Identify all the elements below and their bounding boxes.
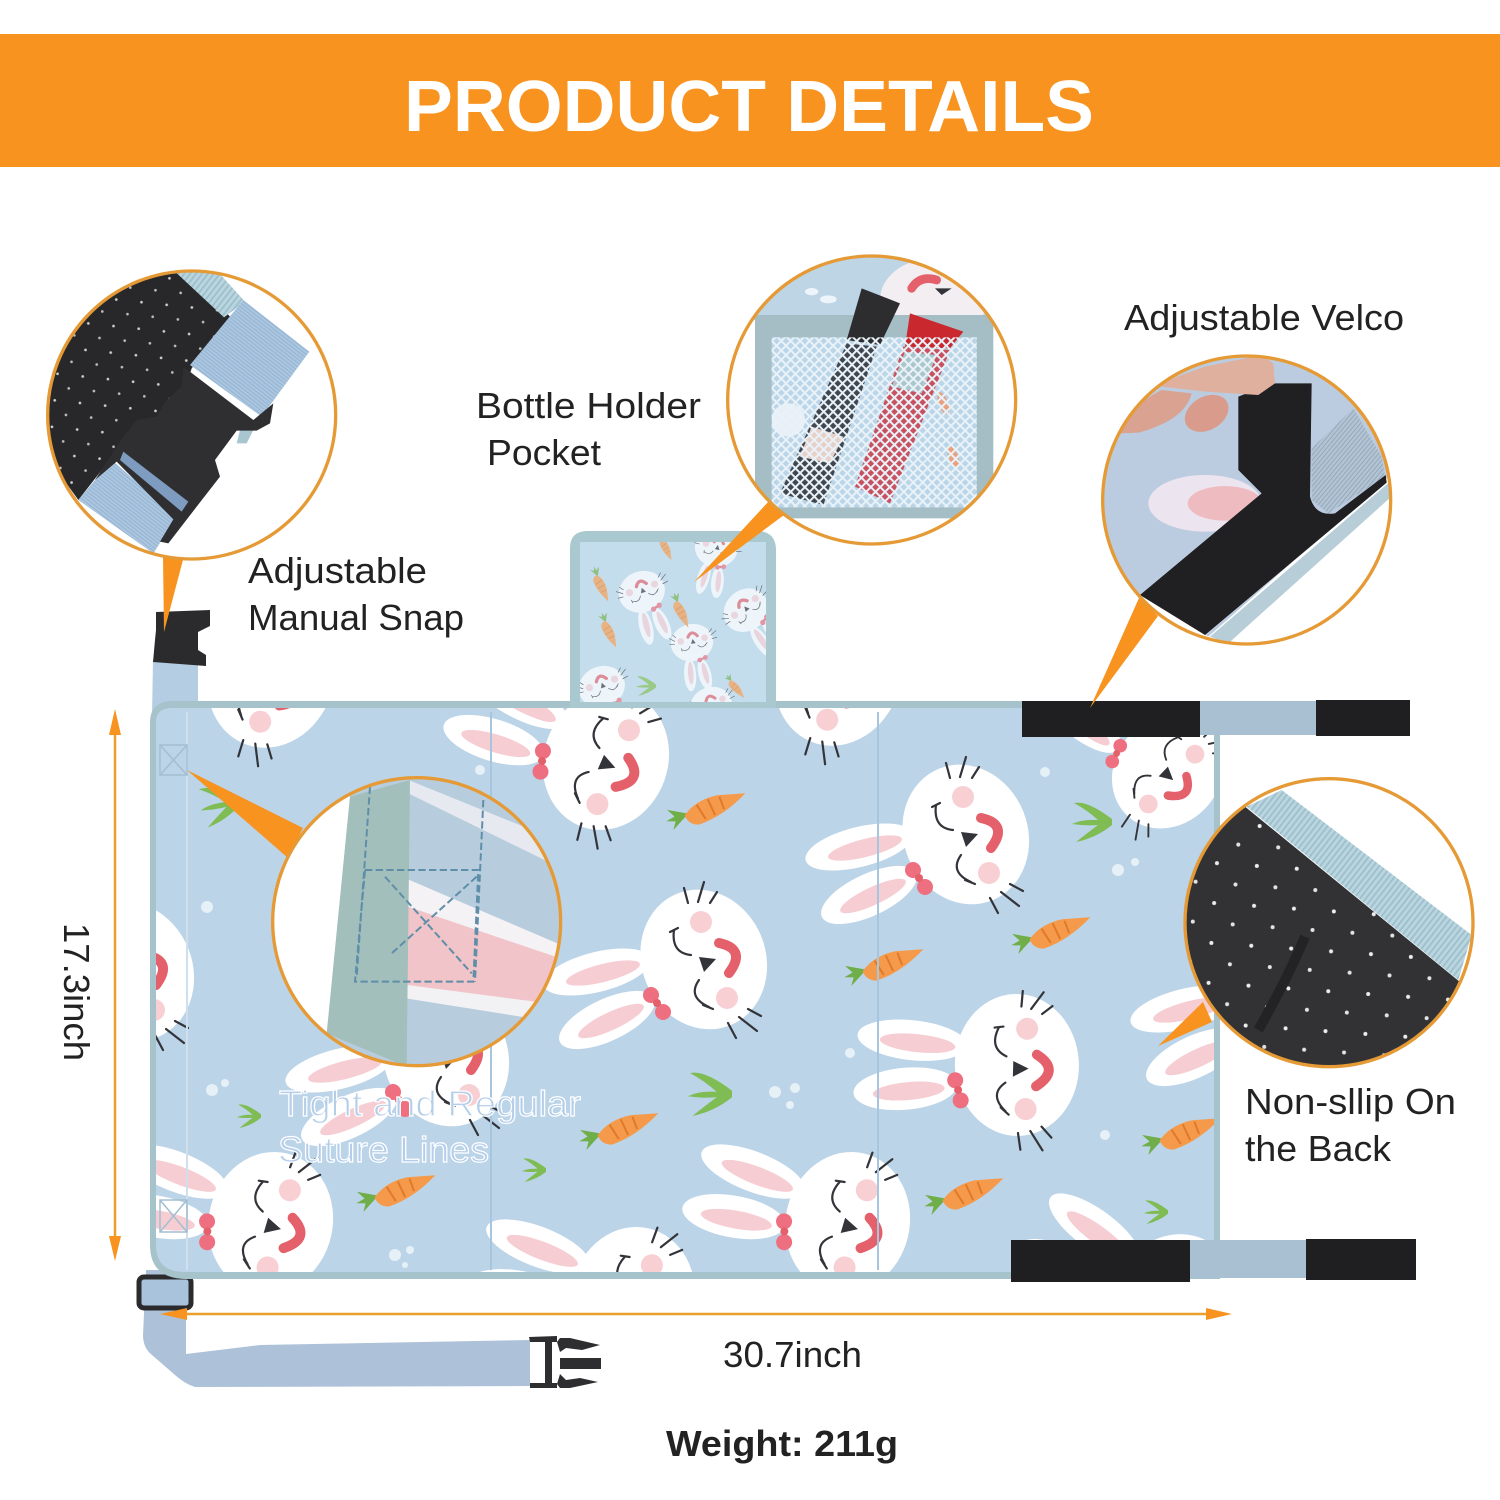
label: adjustable manual snap: Manual Snap xyxy=(248,597,464,638)
title: PRODUCT DETAILS xyxy=(404,67,1094,147)
label: non-slip: the Back xyxy=(1245,1128,1392,1169)
pointer: velcro xyxy=(1090,598,1158,708)
dimension arrow: height xyxy=(109,709,121,1261)
bottle holder pocket flap xyxy=(570,531,776,702)
right straps with velcro xyxy=(1011,700,1416,1282)
side release buckle xyxy=(529,1336,601,1388)
circle: non-slip back detail xyxy=(1175,779,1473,1080)
pointer: non-slip xyxy=(1158,1002,1212,1046)
label: weight: Weight: 211g xyxy=(666,1423,898,1464)
label: adjustable velcro: Adjustable Velco xyxy=(1124,297,1404,338)
top left strap with snap buckle xyxy=(152,610,210,715)
label: suture lines: Suture Lines xyxy=(278,1129,489,1170)
label: bottle holder pocket: Bottle Holder xyxy=(476,385,701,426)
lower left strap with buckles xyxy=(139,1270,601,1388)
label: suture lines: Tight and Regular xyxy=(279,1083,581,1124)
circle: pocket detail xyxy=(728,250,1016,544)
label: non-slip: Non-sllip On xyxy=(1245,1081,1456,1122)
label: height dimension: 17.3inch xyxy=(56,923,97,1061)
label: width dimension: 30.7inch xyxy=(723,1334,862,1375)
dimension arrow: width xyxy=(160,1308,1232,1320)
label: adjustable manual snap: Adjustable xyxy=(248,550,427,591)
pointer: snap xyxy=(163,556,184,632)
main mat xyxy=(150,701,1220,1279)
circle: suture lines detail xyxy=(271,776,562,1068)
pointer: pocket xyxy=(694,500,788,582)
label: bottle holder pocket: Pocket xyxy=(487,432,601,473)
bunny and carrot print xyxy=(0,496,1375,1433)
circle: manual snap detail xyxy=(40,260,336,559)
circle: velcro detail xyxy=(1095,350,1405,644)
pointer: suture xyxy=(187,770,303,858)
header banner xyxy=(0,34,1500,167)
